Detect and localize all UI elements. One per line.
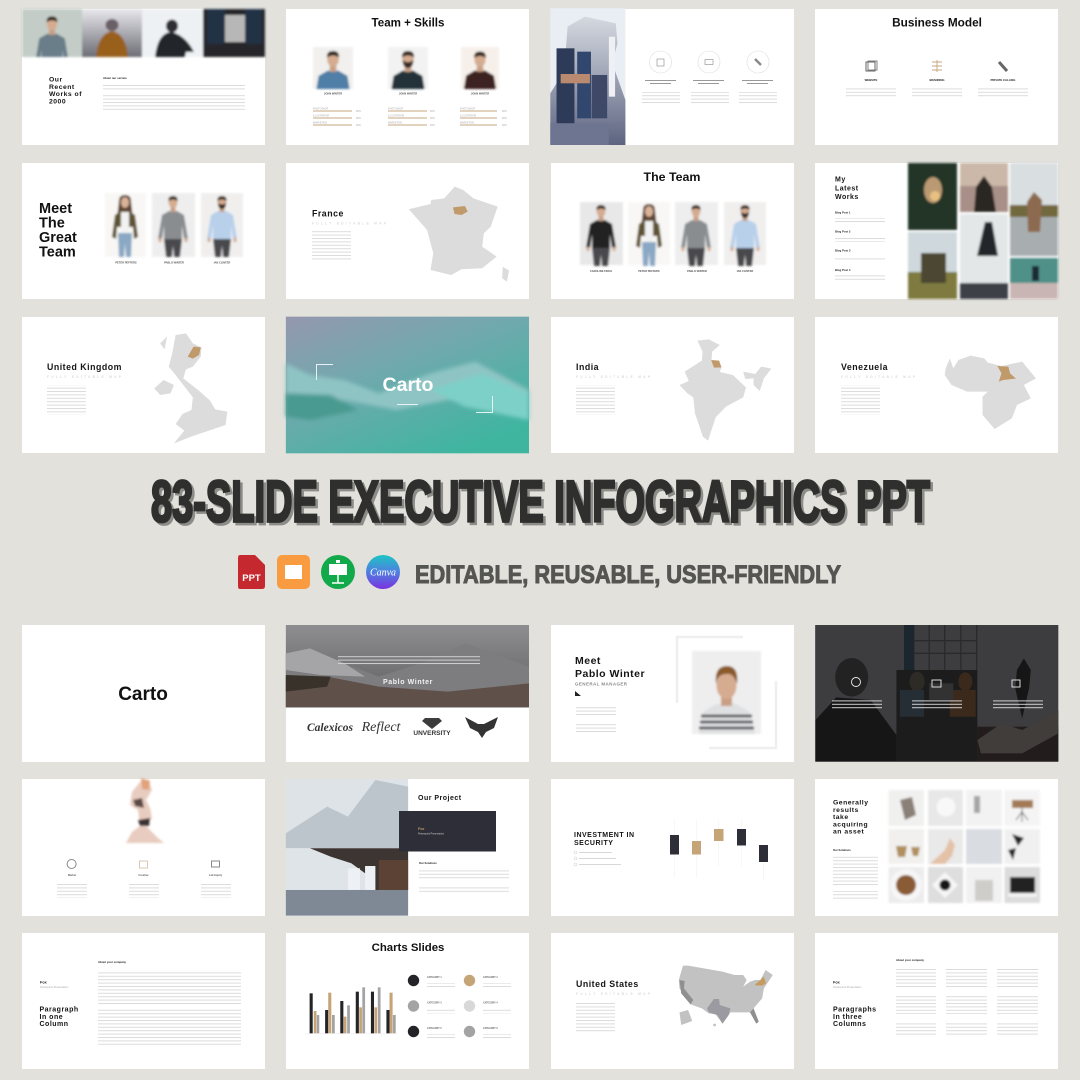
panel: the team (551, 163, 794, 299)
skill bars: 90% (502, 124, 508, 127)
portrait (692, 651, 761, 734)
labels: BRANDING (929, 78, 945, 82)
skill bars: PHOTOSHOP (460, 108, 476, 110)
names: IAN CLINTER (737, 269, 753, 273)
skill bars: PHOTOSHOP (313, 108, 329, 110)
text block (312, 231, 351, 261)
photo: city in silhouette (550, 8, 625, 145)
panel: charts slides (286, 933, 529, 1069)
team photos (105, 193, 243, 257)
heading: Paragraph (40, 1006, 79, 1014)
text block: Our Solutions (419, 861, 437, 865)
photo: dark overlay (815, 625, 1058, 762)
names: CAROLINE FINCH (590, 269, 612, 273)
heading: Meet (575, 655, 601, 667)
subheading: FULLY EDITABLE MAP (47, 375, 123, 379)
photo: mountain banner (286, 625, 529, 707)
panel: latest works (815, 163, 1058, 299)
category list: CATEGORY 1 (427, 976, 442, 979)
map: Venezuela (945, 356, 1036, 429)
skill bars: MARKETING (460, 122, 474, 124)
names: IAN CLINTER (214, 260, 230, 264)
heading: Meet (39, 201, 72, 217)
heading: Team (39, 244, 76, 260)
dark callout: Fox (418, 827, 424, 831)
logo: University (413, 718, 451, 737)
heading: France (312, 208, 344, 218)
label: Fox (833, 980, 841, 984)
feature labels (68, 873, 223, 877)
heading: an asset (833, 828, 864, 836)
skill bars: 90% (502, 110, 508, 113)
logo: University: UNVERSITY (413, 730, 451, 737)
candlestick chart (670, 820, 768, 880)
names: JOHN WINTER (399, 92, 417, 96)
heading: take (833, 814, 849, 821)
skill bars: ILLUSTRATOR (460, 114, 477, 118)
skill bars: 90% (430, 110, 436, 113)
icon: Keynote (321, 555, 355, 589)
heading: India (576, 362, 599, 372)
subheading: FULLY EDITABLE MAP (576, 375, 652, 379)
skill bars: ILLUSTRATOR (388, 114, 405, 118)
heading: Columns (833, 1021, 866, 1028)
category list: CATEGORY 2 (483, 976, 498, 979)
image: painted face (126, 778, 164, 843)
heading: SECURITY (574, 840, 613, 847)
heading: Great (39, 230, 77, 246)
skill bars: ILLUSTRATOR (313, 114, 330, 118)
panel: dark team meeting (815, 625, 1058, 762)
heading: Charts Slides (372, 942, 444, 954)
heading: Works (835, 194, 859, 201)
category list: CATEGORY 4 (483, 1002, 498, 1004)
panel: city double exposure with three icons (550, 8, 794, 145)
feature labels: Lab Equity (209, 873, 223, 877)
feature captions (57, 882, 231, 898)
names: PETER PEFFERS (115, 260, 137, 264)
category list: CATEGORY 5 (427, 1027, 442, 1030)
heading: My (835, 176, 846, 184)
panel: meet the great team (22, 163, 265, 299)
heading: In three (833, 1014, 862, 1021)
icon: Canva (366, 555, 400, 589)
label: Fox (40, 980, 48, 984)
blog list: Blog Post 4 (835, 268, 851, 272)
category list: CATEGORY 6 (483, 1027, 498, 1030)
names: JOHN WINTER (324, 92, 342, 96)
names: PABLO WINTER (164, 260, 184, 264)
panel: recent works (22, 9, 265, 145)
heading: Team + Skills (372, 16, 444, 30)
panel: United Kingdom map (22, 317, 265, 453)
body text (103, 76, 245, 110)
label (833, 980, 862, 989)
heading: Generally (833, 800, 868, 806)
names: PETER PEFFERS (638, 269, 660, 273)
panel: United States map (551, 933, 794, 1069)
photo: snow mountain and waterfall (286, 779, 408, 916)
photo: teal mountain (286, 317, 529, 453)
heading: Paragraphs (833, 1006, 877, 1014)
panel: India map (551, 317, 794, 453)
heading: acquiring (833, 821, 868, 828)
labels: WEBSITE (865, 78, 878, 82)
title: Carto (383, 374, 434, 396)
heading: INVESTMENT IN (574, 832, 635, 839)
subheading: FULLY EDITABLE MAP (312, 222, 388, 226)
feature labels: Creative (138, 873, 149, 877)
text block (576, 385, 615, 415)
panel: paragraphs in three columns (815, 933, 1058, 1069)
name: Pablo Winter (383, 679, 433, 686)
heading: Latest (835, 186, 859, 192)
label: Powerpoint Presentation (833, 985, 862, 989)
panel: Carto teal cover (286, 317, 529, 453)
text columns (896, 958, 1038, 1036)
feature labels: Market (68, 873, 76, 877)
text block (98, 960, 241, 1045)
skill bars: PHOTOSHOP (388, 108, 404, 110)
logo: eagle (465, 717, 498, 738)
blog list: Blog Post 1 (835, 210, 851, 214)
heading: Works of (49, 91, 82, 98)
heading: In one (40, 1014, 63, 1021)
frame (677, 637, 776, 748)
panel: business model (815, 9, 1058, 145)
blog list: Blog Post 3 (835, 248, 851, 252)
heading: Column (40, 1021, 69, 1028)
skill bars: 90% (430, 124, 436, 127)
panel: portrait and three features (22, 778, 265, 916)
text block (841, 385, 880, 415)
panel: investment in security (551, 779, 794, 916)
heading: The (39, 216, 65, 232)
panel: Carto white (22, 625, 265, 762)
quote text (338, 655, 480, 666)
labels (865, 78, 1015, 82)
title: Carto (118, 684, 168, 705)
names: JOHN WINTER (471, 92, 489, 96)
blog list: Blog Post 2 (835, 230, 851, 234)
icon: Google Slides (277, 555, 310, 589)
team photos (580, 202, 766, 266)
feature icons (67, 860, 219, 868)
text block (576, 1002, 615, 1032)
heading: results (833, 807, 859, 814)
subheading: FULLY EDITABLE MAP (841, 375, 917, 379)
icon circles (650, 51, 769, 73)
subheading: GENERAL MANAGER (575, 682, 628, 686)
heading: United Kingdom (47, 362, 122, 372)
skill bars: 90% (356, 117, 362, 120)
logo: Reflect: Reflect (361, 720, 402, 735)
panel: Pablo Winter quote and logos (286, 625, 529, 762)
subheading: FULLY EDITABLE MAP (576, 992, 652, 996)
map: United States (679, 966, 773, 1026)
text block (833, 848, 878, 901)
checklist (574, 851, 621, 866)
icon: PPT file (238, 555, 265, 589)
icons (852, 678, 1020, 687)
panel: our project (286, 779, 529, 916)
heading: The Team (644, 170, 700, 184)
icons (866, 60, 1007, 72)
panel: paragraph in one column (22, 933, 265, 1069)
heading: United States (576, 979, 639, 989)
photo strip (22, 9, 265, 87)
labels: PRIVATE CALLING (991, 78, 1015, 82)
skill bars (313, 108, 508, 127)
captions (642, 80, 777, 105)
icon: marker (575, 691, 581, 696)
names (590, 269, 753, 273)
heading: Business Model (892, 16, 982, 30)
panel: Venezuela map (815, 317, 1058, 453)
map: United Kingdom (154, 333, 227, 443)
panel: France map (286, 163, 529, 299)
product photo grid (888, 790, 1040, 903)
heading: 2000 (49, 98, 66, 106)
logo: Calexicos: Calexicos (307, 722, 354, 734)
heading: Pablo Winter (575, 668, 645, 680)
photo collage (908, 163, 1058, 299)
bar chart (305, 987, 398, 1033)
body text: About our service (103, 76, 127, 80)
text block: Our Solutions (833, 848, 851, 852)
blog list (835, 210, 885, 280)
captions (832, 700, 1043, 710)
names: PABLO WINTER (687, 269, 707, 273)
label: Powerpoint Presentation (40, 985, 69, 989)
panel: meet Pablo Winter (551, 625, 794, 762)
category list: CATEGORY 3 (427, 1002, 442, 1004)
label (40, 980, 69, 989)
text block (419, 861, 509, 893)
captions (846, 88, 1028, 98)
skill bars: 90% (356, 110, 362, 113)
heading: Our (49, 76, 63, 84)
text columns: About your company (896, 958, 924, 962)
tagline: EDITABLE, REUSABLE, USER-FRIENDLY (415, 561, 841, 589)
map: India (679, 339, 771, 441)
icon: PPT file: PPT (242, 573, 261, 584)
dark callout: Powerpoint Presentation (418, 832, 445, 836)
skill bars: MARKETING (313, 122, 327, 124)
skill bars: MARKETING (388, 122, 402, 124)
heading: Our Project (418, 795, 462, 802)
category list (408, 975, 511, 1039)
skill bars: 90% (502, 117, 508, 120)
text block: About your company (98, 960, 126, 964)
names (115, 260, 230, 264)
panel: generally results (815, 779, 1058, 916)
text block (576, 707, 616, 734)
skill bars: 90% (430, 117, 436, 120)
portraits (313, 47, 499, 131)
brackets (316, 364, 492, 412)
map: France (409, 187, 509, 282)
text block (47, 385, 86, 415)
dark callout (399, 811, 496, 852)
names (324, 92, 489, 96)
skill bars: 90% (356, 124, 362, 127)
panel: team and skills (286, 9, 529, 145)
icon: Canva: Canva (370, 568, 396, 578)
heading: Venezuela (841, 362, 888, 372)
heading: Recent (49, 84, 75, 91)
